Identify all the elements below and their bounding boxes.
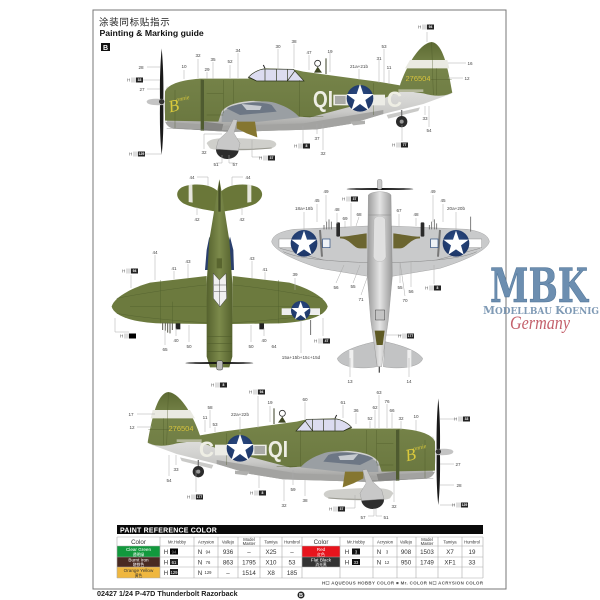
- part number labels: 16: [467, 61, 473, 66]
- table text: Mr.Hobby: [168, 540, 187, 544]
- part number labels: 47: [306, 50, 312, 55]
- table text: 33: [354, 560, 359, 565]
- watermark logo: MBK Modellbau Koenig Germany: MODELLBAU KOENIG: [483, 304, 599, 317]
- part number labels: 14: [406, 379, 412, 384]
- paint callout tags: H: [250, 491, 253, 496]
- paint reference table: [117, 525, 483, 578]
- paint callout tags: H: [425, 286, 428, 291]
- table header bar: PAINT REFERENCE COLOR: [120, 528, 217, 534]
- paint callout tags: [120, 24, 470, 512]
- table text: –: [290, 549, 294, 556]
- part number labels: 65: [162, 347, 168, 352]
- colour swatches: [117, 546, 360, 578]
- table text: –: [226, 570, 230, 577]
- title: 涂装同标贴指示: [99, 16, 170, 28]
- table text: Mr.Hobby: [347, 540, 366, 544]
- part number labels: 54: [426, 128, 432, 133]
- part number labels: 51: [383, 515, 389, 520]
- part number labels: 59: [290, 487, 296, 492]
- part number labels: 15a+15b+15c+15d: [282, 355, 321, 360]
- colour swatches: Clear Green: [126, 547, 151, 552]
- table text: Master: [421, 541, 434, 546]
- paint callout tags: H: [187, 495, 190, 500]
- aircraft: right side view: B: [403, 444, 418, 465]
- paint callout tags: 8: [223, 383, 225, 387]
- table text: 1749: [420, 560, 434, 566]
- table text: 3: [355, 550, 358, 554]
- paint callout tags: 129: [139, 152, 144, 156]
- table text: 863: [223, 560, 234, 566]
- paint callout tags: H: [122, 269, 125, 274]
- aircraft: right side view: QI: [268, 436, 288, 462]
- paint callout tags: 94: [260, 390, 263, 394]
- part number labels: 36: [353, 408, 359, 413]
- table text: Tamiya: [443, 540, 457, 544]
- colour swatches: 黄色: [135, 573, 142, 578]
- part number labels: 45: [314, 198, 320, 203]
- part number labels: 38: [291, 39, 297, 44]
- table text: Model: [243, 537, 255, 542]
- aircraft: left side view: QI: [313, 86, 333, 112]
- part number labels: 19: [327, 49, 333, 54]
- paint callout tags: H: [249, 390, 252, 395]
- part number labels: 31: [376, 56, 382, 61]
- paint callout tags: 77: [403, 143, 406, 147]
- part number labels: 40: [261, 338, 267, 343]
- part number labels: 54: [166, 478, 172, 483]
- paint callout tags: 94: [133, 269, 136, 273]
- aircraft: left side view: onnie: [176, 95, 190, 104]
- part number labels: 29: [204, 67, 210, 72]
- part number labels: 52: [227, 59, 233, 64]
- part number labels: 53: [381, 44, 387, 49]
- part number labels: 71: [358, 297, 364, 302]
- paint callout tags: H: [329, 507, 332, 512]
- part number labels: 50: [248, 344, 254, 349]
- part number labels: 44: [245, 175, 251, 180]
- part number labels: 20a+20b: [447, 206, 465, 211]
- table text: 3: [386, 550, 389, 554]
- part number labels: 22a+22b: [231, 412, 249, 417]
- part number labels: 43: [249, 256, 255, 261]
- part number labels: 42: [194, 217, 200, 222]
- paint callout tags: 129: [462, 503, 467, 507]
- part number labels: 32: [195, 53, 201, 58]
- colour system legend: H☐ AQUEOUS HOBBY COLOR ■ Mr. COLOR N☐ ACRYSION COLOR: [322, 580, 484, 586]
- aircraft: right side view: onnie: [413, 444, 427, 453]
- part number labels: 27: [139, 87, 145, 92]
- aircraft: right side view: [148, 392, 453, 509]
- part number labels: 50: [186, 344, 192, 349]
- part number labels: 32: [201, 150, 207, 155]
- table text: Acrysion: [198, 540, 215, 544]
- table text: Vallejo: [222, 540, 235, 544]
- part number labels: 10: [181, 64, 187, 69]
- aircraft: right side view: 276504: [168, 424, 194, 433]
- paint callout tags: H: [454, 417, 457, 422]
- part number labels: 66: [389, 408, 395, 413]
- part number labels: 56: [408, 289, 414, 294]
- part number labels: 12: [464, 76, 470, 81]
- aircraft: left side view: C: [387, 87, 402, 112]
- table text: X25: [265, 549, 277, 556]
- part number labels: 35: [210, 57, 216, 62]
- part number labels: 58: [207, 405, 213, 410]
- footer product line: 02427 1/24 P-47D Thunderbolt Razorback: [97, 589, 238, 598]
- part number labels: 51: [213, 162, 219, 167]
- part number labels: 67: [396, 208, 402, 213]
- part number labels: 30: [275, 44, 281, 49]
- part number labels: 62: [372, 405, 378, 410]
- part number labels: 53: [212, 422, 218, 427]
- table text: Model: [421, 537, 433, 542]
- table header bar: [117, 525, 483, 534]
- part number labels: 48: [413, 212, 419, 217]
- part number labels: 17: [128, 412, 134, 417]
- part number labels: 33: [422, 116, 428, 121]
- watermark logo: MBK Modellbau Koenig Germany: [483, 259, 599, 334]
- table text: Master: [243, 541, 256, 546]
- colour swatches: Orange Yellow: [124, 568, 154, 573]
- part number labels: 68: [356, 212, 362, 217]
- part number labels: 42: [239, 217, 245, 222]
- table text: 936: [223, 549, 234, 556]
- part number labels: [128, 39, 473, 520]
- title: Painting & Marking guide: [100, 28, 204, 38]
- paint callout tags: 8: [437, 286, 439, 290]
- part number labels: 32: [320, 151, 326, 156]
- part number labels: 64: [271, 344, 277, 349]
- paint callout tags: H: [127, 78, 130, 83]
- part number labels: 18a+18b: [295, 206, 313, 211]
- part number labels: 40: [173, 338, 179, 343]
- part number labels: 28: [138, 65, 144, 70]
- aircraft: underside view: [272, 179, 489, 373]
- page marker B: B: [299, 593, 303, 599]
- table text: H: [164, 570, 168, 577]
- table text: N: [198, 549, 202, 556]
- part number labels: 34: [235, 48, 241, 53]
- page marker B: [298, 592, 304, 599]
- table text: 185: [287, 570, 298, 577]
- table text: 1514: [242, 570, 256, 577]
- part number labels: 52: [367, 416, 373, 421]
- table grid: [117, 537, 483, 578]
- part number labels: 56: [333, 285, 339, 290]
- colour swatches: 消光黑: [315, 562, 327, 567]
- table text: 129: [170, 570, 178, 575]
- table text: X7: [446, 549, 454, 556]
- part number labels: 49: [323, 189, 329, 194]
- table text: N: [198, 570, 202, 577]
- table text: 33: [469, 560, 476, 566]
- paint callout tags: 33: [465, 417, 468, 421]
- part number labels: 11: [203, 415, 208, 420]
- part number labels: 45: [440, 198, 446, 203]
- paint callout tags: 37: [340, 507, 343, 511]
- colour swatches: 透明绿: [133, 552, 144, 557]
- paint callout tags: 33: [138, 78, 141, 82]
- table text: H: [345, 560, 349, 566]
- part number labels: 57: [232, 162, 238, 167]
- colour swatches: 红色: [317, 552, 325, 557]
- title: [99, 16, 204, 38]
- table text: 61: [172, 560, 177, 565]
- table text: 94: [206, 550, 211, 554]
- table text: 12: [385, 560, 390, 565]
- paint callout tags: 177: [408, 334, 413, 338]
- table text: 19: [469, 549, 476, 556]
- table text: Humbrol: [464, 540, 480, 544]
- part number labels: 61: [340, 400, 346, 405]
- section marker B: B: [103, 45, 108, 52]
- part number labels: 32: [391, 504, 397, 509]
- part number labels: 41: [171, 266, 177, 271]
- paint callout tags: H: [314, 339, 317, 344]
- part number labels: 19: [267, 400, 273, 405]
- table text: 950: [401, 560, 412, 566]
- paint callout tags: H: [398, 334, 401, 339]
- paint callout tags: 8: [306, 144, 308, 148]
- paint callout tags: H: [129, 152, 132, 157]
- part number labels: 49: [430, 189, 436, 194]
- table text: Tamiya: [264, 540, 278, 544]
- paint callout tags: 8: [262, 491, 264, 495]
- part number labels: 55: [350, 284, 356, 289]
- table text: 908: [401, 549, 412, 556]
- part number labels: 33: [173, 467, 179, 472]
- table text: H: [164, 560, 168, 566]
- table text: Humbrol: [284, 540, 300, 544]
- watermark logo: MBK Modellbau Koenig Germany: Germany: [510, 313, 570, 334]
- part number labels: 39: [292, 272, 298, 277]
- aircraft: left side view: B: [167, 95, 181, 116]
- table text: 1795: [242, 560, 256, 566]
- table text: Color: [314, 539, 328, 546]
- part number labels: 70: [402, 298, 408, 303]
- leader lines: [115, 32, 466, 516]
- table text: Acrysion: [377, 540, 394, 544]
- aircraft: left side view: [147, 42, 452, 159]
- paint callout tags: H: [211, 383, 214, 388]
- paint callout tags: H: [392, 143, 395, 148]
- part number labels: 21a+21b: [350, 64, 368, 69]
- part number labels: 32: [281, 503, 287, 508]
- section marker B: [101, 43, 110, 52]
- paint callout tags: 177: [197, 495, 202, 499]
- table text: 1503: [420, 549, 434, 556]
- table text: H: [345, 549, 349, 556]
- table text: 76: [206, 560, 211, 565]
- part number labels: 32: [398, 416, 404, 421]
- colour swatches: Flat Black: [311, 558, 332, 562]
- paint callout tags: H: [452, 503, 455, 508]
- colour swatches: Burnt Iron: [128, 558, 149, 562]
- table text: [131, 537, 480, 577]
- paint callout tags: H: [342, 197, 345, 202]
- paint callout tags: H: [120, 334, 123, 339]
- table text: –: [247, 549, 251, 556]
- part number labels: 12: [129, 425, 135, 430]
- table text: 129: [204, 570, 212, 575]
- paint callout tags: H: [294, 144, 297, 149]
- colour swatches: 烧铁色: [133, 562, 144, 567]
- table text: X10: [265, 560, 277, 566]
- paint callout tags: 37: [353, 197, 356, 201]
- table text: N: [198, 560, 202, 566]
- part number labels: 60: [302, 397, 308, 402]
- page frame: [93, 10, 506, 589]
- part number labels: 44: [189, 175, 195, 180]
- part number labels: 69: [342, 216, 348, 221]
- part number labels: 10: [413, 414, 419, 419]
- part number labels: 13: [347, 379, 353, 384]
- part number labels: 41: [262, 267, 268, 272]
- table text: Vallejo: [400, 540, 413, 544]
- table text: H: [164, 549, 168, 556]
- aircraft: left side view: 276504: [405, 74, 431, 83]
- part number labels: 27: [455, 462, 461, 467]
- aircraft: top view: [112, 179, 328, 370]
- part number labels: 63: [376, 390, 382, 395]
- paint callout tags: H: [259, 156, 262, 161]
- paint callout tags: 37: [270, 156, 273, 160]
- part number labels: 76: [384, 399, 390, 404]
- part number labels: 37: [314, 136, 320, 141]
- part number labels: 28: [456, 483, 462, 488]
- colour swatches: Red: [317, 547, 326, 552]
- part number labels: 38: [302, 498, 308, 503]
- paint callout tags: 47: [325, 339, 328, 343]
- part number labels: 43: [185, 259, 191, 264]
- table text: N: [377, 560, 381, 566]
- part number labels: 44: [152, 250, 158, 255]
- paint callout tags: 94: [429, 25, 432, 29]
- table text: X8: [267, 570, 275, 577]
- part number labels: 57: [360, 515, 366, 520]
- paint callout tags: H: [418, 25, 421, 30]
- aircraft: right side view: C: [199, 437, 214, 462]
- part number labels: 55: [397, 285, 403, 290]
- part number labels: 48: [334, 207, 340, 212]
- table text: 53: [289, 560, 296, 566]
- table text: 94: [172, 550, 177, 554]
- table text: XF1: [444, 560, 456, 566]
- table text: Color: [131, 539, 146, 546]
- part number labels: 11: [387, 65, 392, 70]
- table text: N: [377, 549, 381, 556]
